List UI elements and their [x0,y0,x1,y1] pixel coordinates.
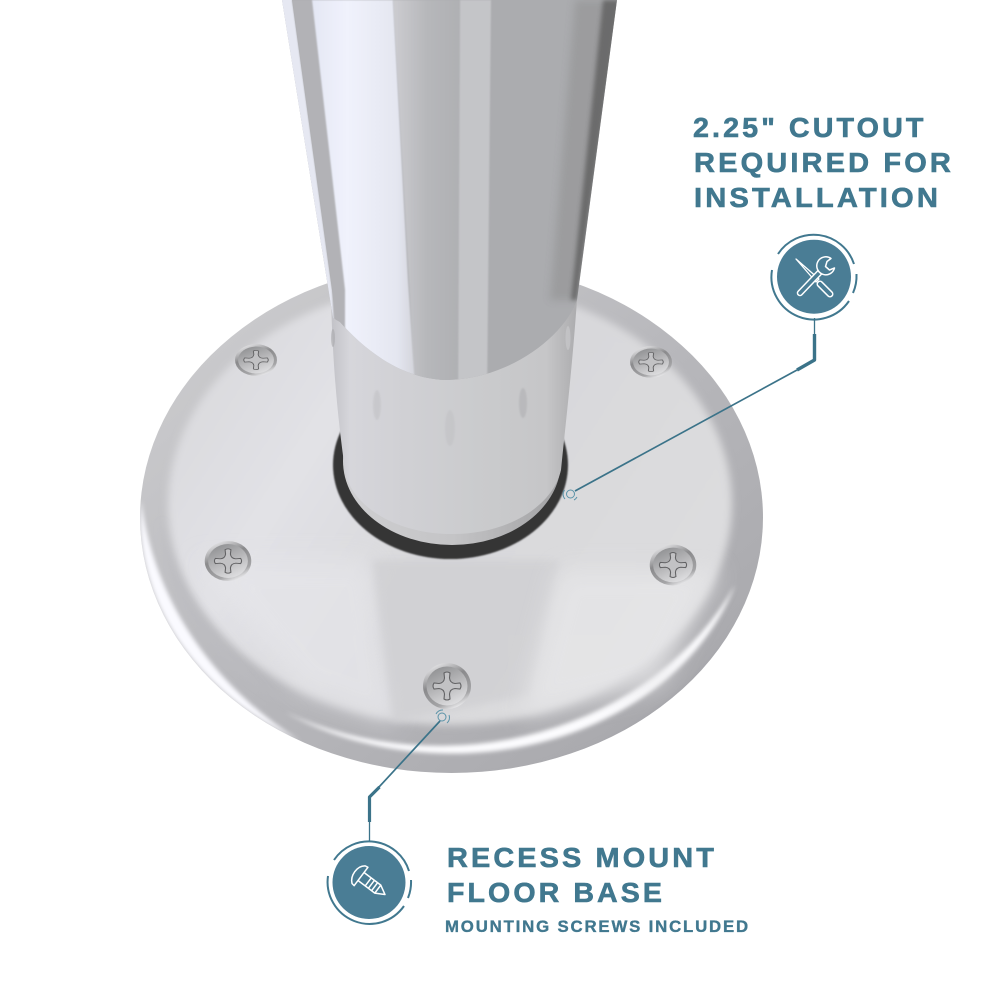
icon: screw [328,841,411,924]
icon: wrench and screwdriver [771,235,857,320]
screw top right [630,346,672,378]
heading: cutout requirement: 2.25" CUTOUT [693,112,926,143]
chrome pole [278,0,620,534]
arrow: leader line to cutout [563,318,814,500]
screw bottom [423,663,471,709]
heading: cutout requirement: REQUIRED FOR [694,147,954,178]
screw middle right [650,545,696,585]
caption: mounting screws included: MOUNTING SCREWS INCLUDED [445,918,750,936]
floor base plate [140,262,763,782]
heading: cutout requirement [693,112,954,213]
heading: cutout requirement: INSTALLATION [694,182,941,213]
heading: recess mount floor base: RECESS MOUNT [447,842,717,873]
heading: recess mount floor base [447,842,717,908]
black rubber ring [333,371,568,559]
heading: recess mount floor base: FLOOR BASE [447,877,665,908]
screw middle left [205,541,251,581]
arrow: leader line to floor base [370,710,450,841]
screw top left [235,344,277,376]
